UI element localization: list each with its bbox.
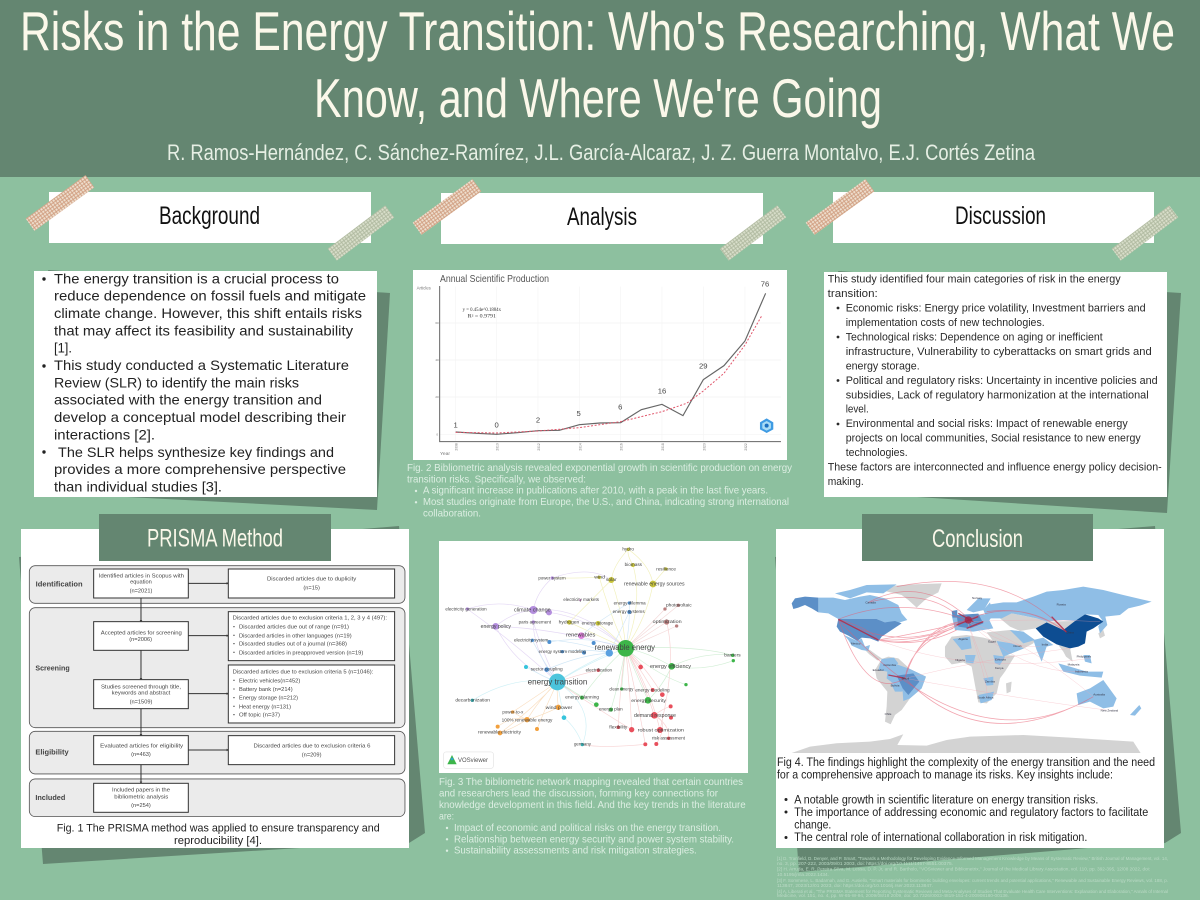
conclusion text: Fig 4. The findings highlight the complexity of the energy transition and the need: [777, 755, 1155, 769]
PRISMA flowchart: Discarded articles due to exclusion criteria 1, 2, 3 y 4 (497):: [233, 616, 387, 622]
axis labels: 2010: [496, 443, 500, 451]
discussion paragraph: [828, 274, 1162, 488]
network labels: energy security: [631, 698, 666, 704]
caption: figure 1: reproducibility [4].: [174, 835, 262, 847]
background paragraph: [54, 270, 366, 494]
heading: Background: Background: [159, 202, 260, 230]
PRISMA flowchart: Discarded articles in other languages (n=19): [239, 633, 352, 639]
map labels: New Zealand: [1101, 708, 1119, 712]
logo: [760, 418, 773, 433]
caption: figure 2: collaboration.: [423, 508, 481, 519]
map labels: [851, 596, 1119, 716]
map labels: Zambia: [985, 679, 995, 683]
axis labels: 2008: [455, 443, 459, 451]
background paragraph: Review (SLR) to identify the main risks: [54, 374, 299, 390]
PRISMA flowchart: Identified articles in Scopus with: [99, 574, 184, 580]
background paragraph: associated with the energy transition and: [54, 392, 322, 408]
discussion paragraph: Environmental and social risks: Impact of renewable energy: [846, 418, 1128, 430]
network labels: risk assessment: [652, 735, 686, 740]
PRISMA flowchart: Included: [35, 793, 65, 802]
background paragraph: interactions [2].: [54, 426, 155, 442]
axis labels: 20: [435, 395, 439, 399]
references: 10.5195/jmla.2022.1434.: [777, 872, 829, 877]
discussion paragraph: projects on local communities, Social resistance to new energy: [846, 433, 1141, 445]
caption: figure 3: [439, 777, 746, 857]
map labels: Russia: [1057, 603, 1066, 607]
axis labels: 2018: [661, 443, 665, 451]
caption: figure 3: Impact of economic and political risks on the energy transition.: [454, 823, 721, 834]
map labels: Australia: [1093, 692, 1105, 696]
references: [3] F. Sommese, L. Badarnah, and G. Ausiello, "Smart materials for biomimetic building envelopes: current trends and potential applications," Renewable and Sustainable Energy Reviews, vol. 188, p.: [777, 878, 1168, 883]
map labels: Nigeria: [955, 658, 965, 662]
conclusion text: The importance of addressing economic and regulatory factors to facilitate: [794, 805, 1148, 819]
network labels: energy storage: [582, 621, 613, 626]
network labels: paris agreement: [519, 619, 552, 624]
conclusion text: for a comprehensive approach to manage its risks. Key insights include:: [777, 768, 1113, 782]
PRISMA flowchart: keywords and abstract: [112, 690, 171, 696]
PRISMA flowchart: Discarded studies out of a journal (n=368): [239, 642, 347, 648]
discussion paragraph: This study identified four main categories of risk in the energy: [828, 274, 1121, 286]
conclusion heading: Conclusion: [932, 525, 1023, 553]
discussion paragraph: subsidies, Lack of regulatory harmonization at the international: [846, 389, 1149, 401]
background paragraph: that may affect its feasibility and sustainability: [54, 322, 353, 338]
PRISMA flowchart: Screening: [35, 663, 70, 672]
heading: Discussion: [806, 179, 1178, 261]
PRISMA flowchart: Identification: [36, 580, 83, 589]
discussion paragraph: infrastructure, Vulnerability to cyberattacks on smart grids and: [846, 346, 1152, 358]
panel: conclusion: [775, 514, 1181, 872]
PRISMA flowchart: (n=463): [131, 752, 151, 758]
map labels: Colombia: [883, 663, 896, 667]
PRISMA flowchart: Accepted articles for screening: [101, 630, 182, 636]
PRISMA flowchart: Energy storage (n=212): [239, 696, 298, 702]
axis labels: 2014: [578, 443, 582, 451]
background paragraph: provides a more comprehensive perspective: [54, 461, 346, 477]
PRISMA flowchart: (n=2021): [130, 589, 152, 595]
network nodes: [466, 548, 735, 746]
heading: Discussion: Discussion: [955, 202, 1046, 230]
axis labels: Year: [440, 451, 450, 457]
conclusion text: change.: [794, 817, 831, 831]
PRISMA flowchart: bibliometric analysis: [114, 794, 168, 800]
discussion paragraph: making.: [828, 476, 864, 488]
equation: R² = 0.9791: [468, 314, 497, 320]
data labels: 16: [658, 387, 666, 396]
caption: figure 2: transition risks. Specifically, we observed:: [407, 474, 586, 485]
network labels: energy transition: [528, 677, 587, 687]
world collaboration map: [792, 581, 1152, 753]
background paragraph: develop a conceptual model describing their: [54, 409, 346, 425]
map labels: Bolivia: [891, 683, 900, 687]
data labels: 6: [618, 403, 622, 412]
caption: figure 3: knowledge development in this field. And the key trends in the literature: [439, 800, 746, 811]
network labels: wind: [594, 575, 605, 580]
title: Know, and Where We're Going: [314, 67, 882, 129]
PRISMA flowchart: Electric vehicles(n=452): [239, 678, 300, 684]
network labels: germany: [574, 742, 592, 747]
PRISMA flowchart: equation: [130, 580, 152, 586]
discussion paragraph: Technological risks: Dependence on aging or inefficient: [846, 332, 1104, 344]
data line: [456, 293, 766, 434]
network labels: barriers: [724, 652, 741, 657]
caption: figure 2: Most studies originate from Europe, the U.S., and China, indicating strong international: [423, 497, 789, 508]
background paragraph: climate change. However, this shift entails risks: [54, 305, 362, 321]
conclusion text: [777, 755, 1155, 844]
heading: Analysis: [413, 179, 786, 261]
references: [777, 856, 1168, 898]
network labels: decarbonization: [455, 697, 490, 702]
network labels: hydro: [622, 547, 634, 552]
network labels: power-to-x: [502, 709, 524, 714]
network labels: solar: [606, 577, 617, 582]
conclusion text: A notable growth in scientific literature on energy transition risks.: [794, 792, 1098, 806]
axis labels: Articles: [417, 286, 431, 291]
authors: R. Ramos-Hernández, C. Sánchez-Ramírez, J.L. García-Alcaraz, J. Z. Guerra Montalvo, E.J. Cortés Zetina: [167, 140, 1036, 165]
conclusion text: The central role of international collaboration in risk mitigation.: [794, 830, 1087, 844]
network labels: biomass: [625, 562, 643, 567]
chart title: Annual Scientific Production: [440, 274, 549, 285]
network labels: sector coupling: [531, 667, 563, 672]
map labels: Oman: [1013, 644, 1022, 648]
map labels: Mexico: [851, 642, 861, 646]
discussion paragraph: transition:: [828, 288, 878, 300]
map labels: Ecuador: [873, 668, 884, 672]
data labels: 29: [699, 362, 708, 371]
discussion paragraph: Economic risks: Energy price volatility, Investment barriers and: [846, 303, 1146, 315]
caption: figure 2: Fig. 2 Bibliometric analysis revealed exponential growth in scientific production on energy: [407, 463, 793, 474]
caption: figure 3: and researchers lead the discussion, forming key connections for: [439, 788, 718, 799]
VOSviewer badge: VOSviewer: [458, 757, 488, 764]
map labels: Malaysia: [1068, 663, 1080, 667]
network labels: 100% renewable energy: [502, 717, 553, 722]
network labels: electrification: [586, 668, 612, 673]
map labels: Chile: [885, 712, 892, 716]
VOSviewer badge: [444, 752, 493, 768]
equation: [463, 308, 502, 320]
discussion bullets: [837, 307, 839, 425]
background paragraph: This study conducted a Systematic Literature: [54, 357, 349, 373]
PRISMA flowchart: Discarded articles in preapproved version (n=19): [239, 650, 363, 656]
references: 113847, 2023/12/01 2023, doi: https://doi.org/10.1016/j.rser.2023.113847.: [777, 883, 933, 888]
data labels: 2: [536, 415, 540, 424]
PRISMA flowchart: Discarded articles due to duplicity: [267, 577, 356, 583]
network labels: energy policy: [481, 624, 511, 630]
PRISMA flowchart: (n=254): [131, 803, 151, 809]
discussion paragraph: implementation costs of new technologies.: [846, 317, 1045, 329]
network labels: energy planning: [565, 695, 599, 700]
panel: discussion text: [824, 271, 1181, 513]
map labels: Ethiopia: [995, 657, 1006, 661]
PRISMA heading: PRISMA Method: [147, 525, 283, 553]
caption: figure 3: Sustainability assessments and risk mitigation strategies.: [454, 846, 697, 857]
PRISMA flowchart: Discarded articles due out of range (n=91): [239, 625, 349, 631]
network labels: energy system modeling: [539, 649, 586, 654]
network labels: flexibility: [609, 724, 628, 729]
background paragraph: The SLR helps synthesize key findings and: [58, 444, 334, 460]
references: no. 3, pp. 207-222, 2003/09/01 2003, doi: https://doi.org/10.1111/1467-8551.00375.: [777, 861, 953, 866]
panel: PRISMA method: [19, 514, 425, 864]
map labels: South Africa: [977, 695, 994, 699]
map labels: Kenya: [995, 666, 1004, 670]
panel: background text: [34, 270, 390, 510]
network labels: robust optimization: [638, 728, 684, 734]
equation: y = 0.454e^0.1884x: [463, 308, 502, 313]
network labels: energy modeling: [635, 687, 670, 692]
network labels: renewable electricity: [478, 730, 522, 735]
map land: [792, 583, 1152, 753]
network labels: photovoltaic: [666, 602, 692, 607]
network labels: energy dilemma: [614, 600, 646, 605]
PRISMA flowchart: Evaluated articles for eligibility: [100, 743, 183, 749]
caption: figure 3: Fig. 3 The bibliometric network mapping revealed that certain countries: [439, 777, 743, 788]
data labels: 0: [495, 421, 499, 430]
axis labels: [417, 286, 748, 457]
conclusion heading: [862, 514, 1093, 561]
network edges: [467, 549, 733, 746]
axis labels: 2020: [702, 443, 706, 451]
network labels: energy efficiency: [650, 664, 691, 670]
network labels: resilience: [656, 566, 676, 571]
PRISMA flowchart: Off topic (n=37): [239, 713, 280, 719]
PRISMA flowchart: (n=1509): [130, 699, 152, 705]
background paragraph: The energy transition is a crucial process to: [54, 270, 339, 286]
data labels: [454, 279, 769, 430]
axis labels: 2012: [537, 443, 541, 451]
axis labels: 2022: [744, 443, 748, 451]
caption: figure 2: [407, 463, 793, 519]
map labels: Norway: [972, 596, 983, 600]
network labels: [445, 547, 741, 747]
map labels: Brazil: [902, 677, 909, 681]
background paragraph: than individual studies [3].: [54, 478, 222, 494]
map labels: Algeria: [958, 637, 968, 641]
map labels: Philippines: [1077, 655, 1092, 659]
network labels: renewable energy sources: [624, 581, 685, 587]
PRISMA flowchart: Included papers in the: [112, 788, 170, 794]
PRISMA flowchart: (n=209): [302, 752, 322, 758]
discussion paragraph: energy storage.: [846, 360, 920, 372]
PRISMA heading: [99, 514, 331, 561]
network labels: renewables: [566, 633, 596, 639]
caption: figure 3: are:: [439, 811, 454, 822]
background bullets: [42, 277, 46, 454]
background paragraph: reduce dependence on fossil fuels and mitigate: [54, 288, 366, 304]
discussion paragraph: level.: [846, 404, 869, 416]
references: Medicine, vol. 151, no. 4, pp. W-65-W-94, 2009/08/18 2009, doi: 10.7326/0003-4819-151-4-200908180-00136.: [777, 893, 1009, 898]
header band: [0, 0, 1200, 177]
panel: bibliometric network: [439, 541, 748, 773]
map labels: Indonesia: [1075, 669, 1088, 673]
caption: figure 2: A significant increase in publications after 2010, with a peak in the last five years.: [423, 486, 768, 497]
title: [20, 0, 1175, 129]
PRISMA flowchart: Eligibility: [35, 748, 70, 757]
data labels: 1: [454, 421, 458, 430]
axis labels: 2016: [620, 443, 624, 451]
network labels: clean energy: [609, 686, 634, 691]
collaboration arcs: [838, 581, 1093, 723]
network labels: electricity system: [514, 638, 548, 643]
references: [1] D. Tranfield, D. Denyer, and P. Smart, "Towards a Methodology for Developing Evidence-Informed Management Knowledge by Means of Systematic Review," British Journal of Management, vol. 14,: [777, 856, 1168, 861]
caption: figure 1: Fig. 1 The PRISMA method was applied to ensure transparency and: [57, 823, 380, 835]
network labels: power system: [538, 575, 566, 580]
axes: [440, 286, 781, 442]
references: [4] A. Liberati et al., "The PRISMA Statement for Reporting Systematic Reviews and Meta-Analyses of Studies That Evaluate Health Care Interventions: Explanation and Elaboration," Annals of Internal: [777, 889, 1168, 894]
PRISMA flowchart: (n=15): [303, 585, 320, 591]
network labels: electricity markets: [563, 597, 600, 602]
axis labels: 40: [435, 358, 439, 362]
discussion paragraph: These factors are interconnected and influence energy policy decision-: [828, 462, 1162, 474]
network labels: energy plan: [599, 707, 623, 712]
discussion paragraph: Political and regulatory risks: Uncertainty in incentive policies and: [846, 375, 1158, 387]
network labels: optimization: [653, 619, 682, 624]
network labels: hydrogen: [559, 620, 580, 625]
network labels: renewable energy: [595, 642, 656, 652]
heading: Analysis: Analysis: [567, 203, 637, 231]
panel: annual production chart: [413, 270, 787, 460]
references: [2] H. Arruda, E. R. Pereira Silva, M. Lessa, D. P. Jr, and R. Bartholo, "VOSviewer and Bibliometrix," Journal of the Medical Library Association, vol. 110, pp. 392-395, 12/08 2022, doi:: [777, 866, 1150, 872]
network labels: wind power: [546, 705, 573, 711]
map labels: China: [1066, 631, 1074, 635]
network labels: energy systems: [613, 609, 645, 614]
axis labels: 0: [436, 432, 438, 436]
network labels: demand response: [634, 713, 676, 719]
PRISMA flowchart: Studies screened through title,: [101, 684, 181, 690]
PRISMA flowchart: Battery bank (n=214): [239, 687, 293, 693]
discussion paragraph: technologies.: [846, 447, 908, 459]
PRISMA flowchart: Discarded articles due to exclusion criteria 6: [253, 743, 370, 749]
background paragraph: [1].: [54, 340, 72, 356]
network labels: climate change: [514, 608, 551, 614]
data labels: 5: [577, 409, 581, 418]
network labels: electricity generation: [445, 606, 487, 611]
PRISMA flowchart: Discarded articles due to exclusion criteria 5 (n=1046):: [233, 670, 374, 676]
map labels: Egypt: [988, 639, 996, 643]
map labels: Canada: [865, 601, 876, 605]
caption: figure 3: Relationship between energy security and power system stability.: [454, 834, 734, 845]
caption: figure 1: [57, 823, 380, 847]
data labels: 76: [761, 279, 769, 288]
map labels: India: [1042, 643, 1048, 647]
axis labels: 60: [435, 321, 439, 325]
PRISMA flowchart: (n=2006): [129, 637, 152, 643]
heading: Background: [26, 175, 394, 261]
trend line: [456, 316, 762, 433]
PRISMA flowchart: Heat energy (n=131): [239, 704, 291, 710]
PRISMA flowchart: [29, 566, 405, 817]
